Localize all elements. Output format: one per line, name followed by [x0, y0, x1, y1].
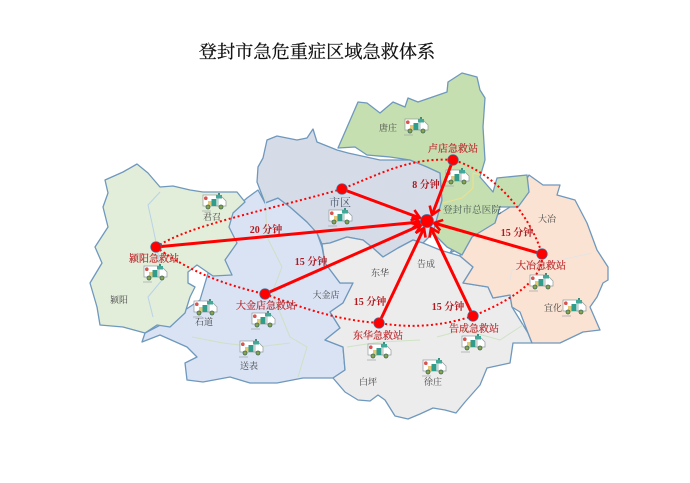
- place name labels: 大金店: [312, 289, 340, 300]
- travel time labels: 15 分钟: [354, 295, 386, 308]
- marker: 大冶急救站: [537, 249, 547, 259]
- region: 颍阳 pale green area: [90, 164, 245, 333]
- marker: 市区: [337, 184, 347, 194]
- travel time labels: 15 分钟: [501, 226, 533, 239]
- marker: 大金店急救站: [260, 289, 270, 299]
- dotted link: upper arc: [156, 160, 542, 254]
- arrow: 大冶 to hospital, 15 min: [434, 223, 542, 254]
- place name labels: 东华: [371, 267, 389, 278]
- icon: ambulance 送表: [239, 339, 263, 357]
- icon: ambulance 大冶: [529, 273, 553, 291]
- station labels: 东华急救站: [353, 329, 403, 342]
- place name labels: 市区: [329, 196, 351, 209]
- place name labels: 送表: [240, 360, 258, 371]
- travel time labels: 15 分钟: [295, 255, 327, 268]
- marker: 东华急救站: [374, 318, 384, 328]
- travel time labels: [250, 178, 533, 313]
- station labels: [129, 142, 566, 342]
- marker: 登封市总医院 hub: [420, 214, 434, 228]
- ambulance icons: [143, 117, 586, 376]
- arrow: 东华 to hospital, 15 min: [379, 228, 424, 323]
- place name labels: 徐庄: [424, 376, 442, 387]
- icon: ambulance 东华: [367, 342, 391, 360]
- place name labels: [110, 122, 562, 387]
- place name labels: 宜化: [544, 302, 562, 313]
- dotted link: lower arc: [156, 247, 542, 326]
- travel time labels: 20 分钟: [250, 223, 282, 236]
- rivers and roads: [148, 173, 592, 377]
- icon: ambulance 徐庄: [422, 358, 446, 376]
- travel time labels: 15 分钟: [432, 300, 464, 313]
- marker: 告成急救站: [468, 311, 478, 321]
- place name labels: 告成: [417, 258, 435, 269]
- place name labels: 君召: [203, 212, 221, 222]
- title: 登封市急危重症区域急救体系: [199, 42, 435, 62]
- map of Dengfeng regions: [90, 73, 608, 419]
- icon: ambulance 宜化: [562, 298, 586, 316]
- station labels: 大金店急救站: [236, 299, 296, 312]
- icon: ambulance 卢店: [445, 168, 469, 186]
- place name labels: 大冶: [538, 213, 557, 224]
- place name labels: 白坪: [359, 376, 377, 387]
- region: 告成 / 东华 light grey area: [322, 237, 532, 419]
- station labels: 大冶急救站: [516, 259, 566, 272]
- arrow: 市区 to hospital: [342, 189, 420, 218]
- region: 大冶 / 宜化 orange area: [450, 175, 608, 343]
- icon: ambulance 唐庄: [404, 117, 428, 135]
- travel time labels: 8 分钟: [412, 178, 440, 191]
- place name labels: 唐庄: [379, 122, 397, 133]
- icon: ambulance 大金店: [251, 311, 275, 329]
- station labels: 颍阳急救站: [129, 252, 179, 265]
- icon: ambulance 颍阳: [143, 264, 167, 282]
- station labels: 告成急救站: [449, 322, 499, 335]
- region: 大金店 blue area: [142, 190, 353, 383]
- marker: 卢店急救站: [448, 155, 458, 165]
- region: 市区 grey-blue area: [257, 129, 442, 257]
- icon: ambulance 告成: [461, 334, 485, 352]
- station markers: [151, 155, 547, 328]
- place name labels: 登封市总医院: [443, 203, 501, 216]
- place name labels: 石道: [195, 316, 213, 327]
- icon: ambulance 君召: [202, 193, 226, 211]
- region: 唐庄 / 卢店 green area: [338, 73, 529, 255]
- station labels: 卢店急救站: [428, 142, 478, 155]
- arrow: 卢店 to hospital, 8 min: [432, 160, 453, 215]
- icon: ambulance 石道: [193, 299, 217, 317]
- icon: ambulance 市区: [328, 208, 352, 226]
- place name labels: 颍阳: [110, 294, 128, 305]
- arrows to the general hospital: [156, 160, 542, 323]
- arrow: 告成 to hospital, 15 min: [431, 228, 473, 316]
- arrow: 大金店 to hospital, 15 min: [265, 225, 421, 294]
- marker: 颍阳急救站: [151, 242, 161, 252]
- arrow: 颍阳 to hospital, 20 min: [156, 222, 420, 247]
